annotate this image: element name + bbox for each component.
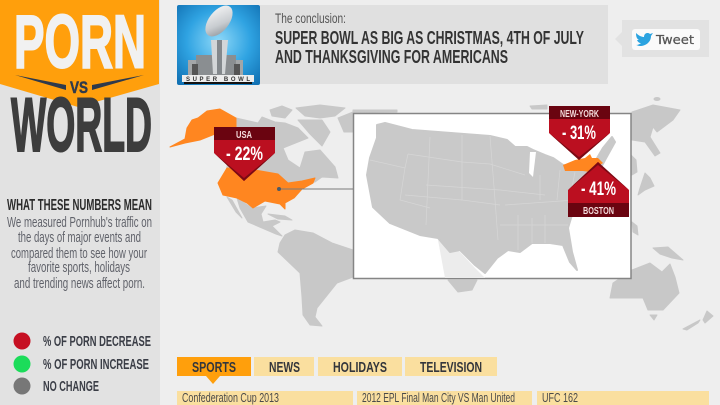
text block: explanation: the days of major events and: [18, 230, 141, 246]
logo: vs divider: VS: [70, 78, 88, 97]
inset: lake michigan: [529, 152, 536, 177]
text block: explanation: [7, 215, 152, 292]
tab: television: [405, 357, 497, 376]
conclusion headline: AND THANKSGIVING FOR AMERICANS: [275, 47, 508, 67]
icon: super bowl trophy: [177, 1, 260, 85]
badge: Boston: BOSTON: [583, 205, 614, 217]
badge: New York: NEW-YORK: [560, 108, 599, 120]
tab: holidays: [318, 357, 402, 376]
event: EPL final: 2012 EPL Final Man City VS Man United: [362, 390, 515, 405]
badge: Boston: - 41%: [581, 179, 616, 200]
logo banner: [0, 0, 159, 107]
legend: NO CHANGE: [43, 379, 99, 395]
badge: USA: - 22%: [226, 144, 263, 165]
map: USA highlight: [170, 109, 315, 209]
icon: twitter bird: [636, 33, 653, 46]
category tabs: [177, 357, 497, 384]
panel: conclusion: [260, 5, 608, 84]
badge: USA: USA: [236, 129, 252, 141]
text block: explanation: compared them to see how your: [11, 246, 147, 262]
logo: vs divider: [15, 75, 144, 97]
tab: television: TELEVISION: [420, 359, 482, 376]
badge: USA: [214, 127, 275, 181]
badge: Boston: [568, 162, 629, 217]
heading: what these numbers mean: WHAT THESE NUMBERS MEAN: [7, 197, 152, 214]
event: UFC 162: UFC 162: [542, 390, 578, 405]
panel: sidebar: [0, 0, 160, 405]
icon: super bowl trophy: SUPER BOWL: [186, 77, 250, 83]
legend: % OF PORN INCREASE: [43, 357, 149, 373]
inset: USA close-up: [354, 114, 631, 278]
world map: [170, 98, 713, 330]
logo: PORN: PORN: [14, 0, 146, 84]
inset: state boundaries: [370, 135, 575, 250]
map: New York highlight: [563, 154, 603, 172]
conclusion label: The conclusion:: [275, 11, 346, 26]
conclusion headline: SUPER BOWL AS BIG AS CHRISTMAS, 4TH OF JULY: [275, 28, 584, 48]
connector line: [277, 187, 353, 191]
tweet button: [615, 20, 709, 57]
legend: [14, 332, 151, 395]
legend: % OF PORN DECREASE: [43, 334, 151, 350]
inset: faint mexico: [438, 240, 485, 278]
inset: USA states: [367, 123, 615, 273]
tab: sports (active): [177, 357, 251, 384]
tab: news: NEWS: [269, 359, 300, 376]
tweet label: Tweet: [655, 33, 694, 47]
tab: holidays: HOLIDAYS: [333, 359, 387, 376]
event: UFC 162: [537, 390, 709, 405]
event list: [177, 390, 709, 405]
text block: explanation: We measured Pornhub's traffic on: [7, 215, 152, 231]
text block: explanation: and trending news affect porn.: [14, 276, 145, 292]
text block: explanation: favorite sports, holidays: [28, 260, 130, 276]
badge: New York: [549, 106, 610, 160]
tab: news: [254, 357, 314, 376]
event: confederation cup: Confederation Cup 2013: [182, 390, 279, 405]
tab: sports (active): SPORTS: [192, 359, 236, 376]
badge: New York: - 31%: [562, 123, 596, 144]
panel: sidebar: WORLD: [11, 83, 152, 168]
conclusion headline: [275, 28, 584, 67]
map: grey landmasses: [226, 98, 713, 330]
